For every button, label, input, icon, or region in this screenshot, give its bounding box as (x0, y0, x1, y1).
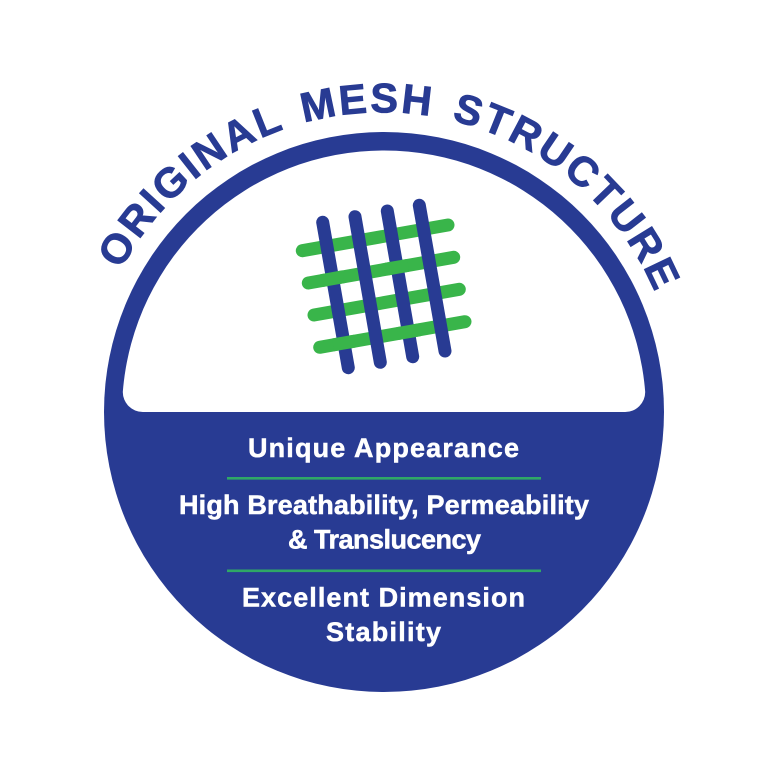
title: curved heading: ORIGINAL MESH STRUCTURE (101, 83, 680, 291)
white upper panel (123, 150, 645, 412)
benefit: breathability, permeability and translucency: High Breathability, Permeability (179, 490, 589, 520)
blue circle (104, 132, 664, 692)
icon: woven mesh (302, 205, 465, 368)
benefit: dimension stability: Stability (326, 617, 441, 647)
benefit: unique appearance: Unique Appearance (248, 433, 519, 463)
divider (227, 477, 541, 480)
benefit: breathability, permeability and translucency: & Translucency (288, 524, 481, 554)
benefit: breathability, permeability and translucency (179, 490, 589, 554)
benefit: dimension stability: Excellent Dimension (242, 582, 525, 612)
benefit: dimension stability (242, 582, 525, 647)
divider (227, 570, 541, 572)
